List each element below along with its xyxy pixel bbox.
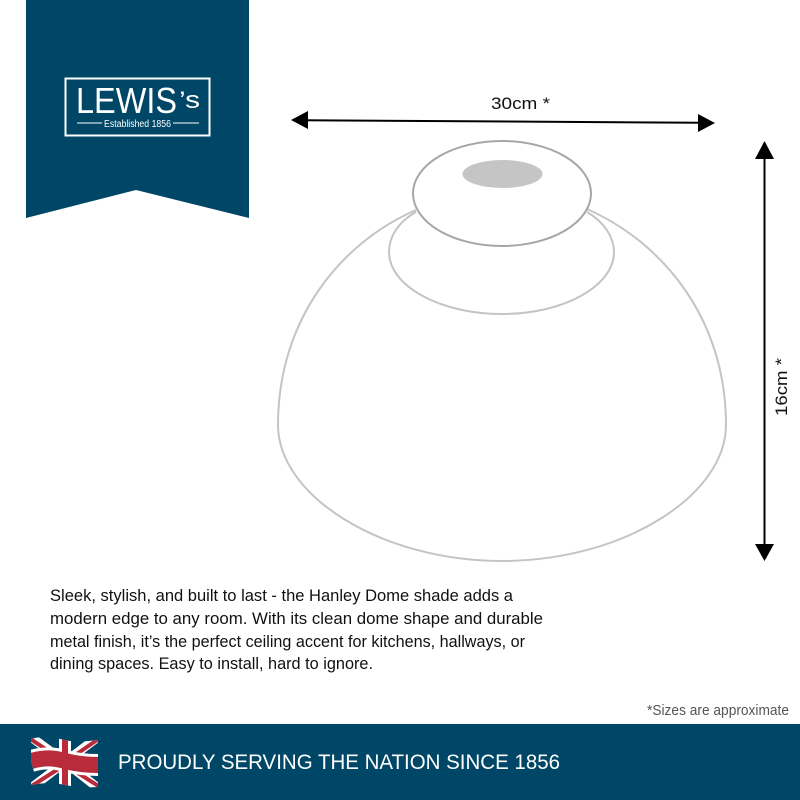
banner with logo	[26, 0, 249, 218]
lamp shade line drawing	[278, 141, 726, 561]
logo: Lewis's	[66, 78, 210, 136]
width label: 30cm *	[491, 94, 550, 113]
shade top ring	[413, 141, 591, 246]
logo: Lewis's: ’s	[179, 87, 200, 114]
sizes note: *Sizes are approximate	[647, 702, 789, 719]
dimension arrow: width	[291, 111, 715, 132]
dimension arrow: height	[755, 141, 774, 561]
icon: union flag	[31, 737, 98, 788]
product description	[50, 586, 543, 673]
product description: modern edge to any room. With its clean dome shape and durable	[50, 609, 543, 628]
product description: metal finish, it’s the perfect ceiling accent for kitchens, hallways, or	[50, 632, 525, 651]
logo: Lewis's: Established 1856	[104, 119, 171, 130]
product description: Sleek, stylish, and built to last - the Hanley Dome shade adds a	[50, 586, 514, 605]
product description: dining spaces. Easy to install, hard to ignore.	[50, 654, 373, 673]
footer slogan: PROUDLY SERVING THE NATION SINCE 1856	[118, 751, 560, 774]
height label: 16cm *	[772, 358, 791, 416]
logo: Lewis's: LEWIS	[76, 80, 177, 121]
shade collar	[389, 212, 614, 314]
top opening	[462, 160, 542, 188]
footer band	[0, 724, 800, 800]
dome body	[278, 209, 726, 561]
